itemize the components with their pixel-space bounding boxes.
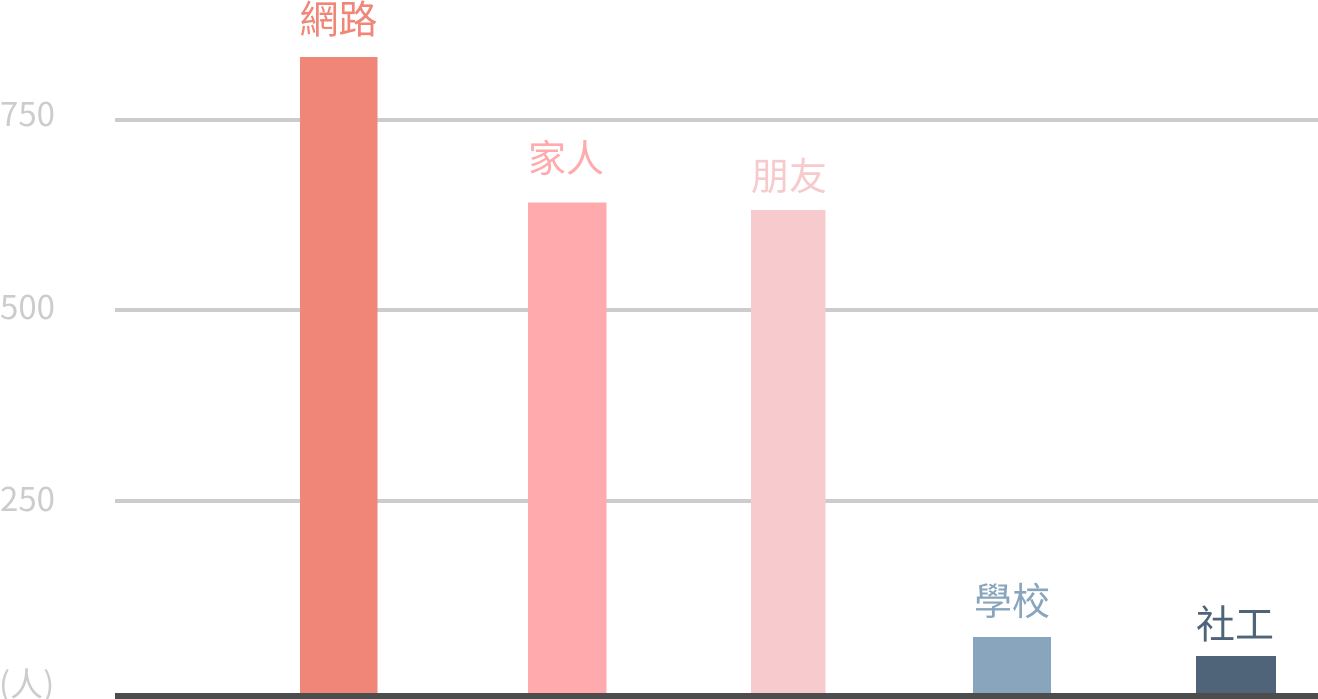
y axis labels: 500 xyxy=(0,281,55,329)
bar: 朋友: 朋友 xyxy=(751,157,827,199)
bar: 家人: 家人 xyxy=(528,139,604,181)
bar: 網路: 網路 xyxy=(299,0,378,42)
y axis labels: 250 xyxy=(0,473,55,521)
bar: 家人 xyxy=(528,139,606,694)
x axis baseline xyxy=(115,693,1318,699)
bar: 網路 xyxy=(299,0,378,694)
y axis labels xyxy=(0,88,55,521)
bar: 朋友 xyxy=(751,157,827,694)
bar: 社工 xyxy=(1196,604,1276,694)
bar: 社工: 社工 xyxy=(1196,604,1274,648)
bar: 學校: 學校 xyxy=(974,582,1050,624)
y axis labels: 750 xyxy=(0,88,55,136)
bar: 學校 xyxy=(973,582,1051,694)
